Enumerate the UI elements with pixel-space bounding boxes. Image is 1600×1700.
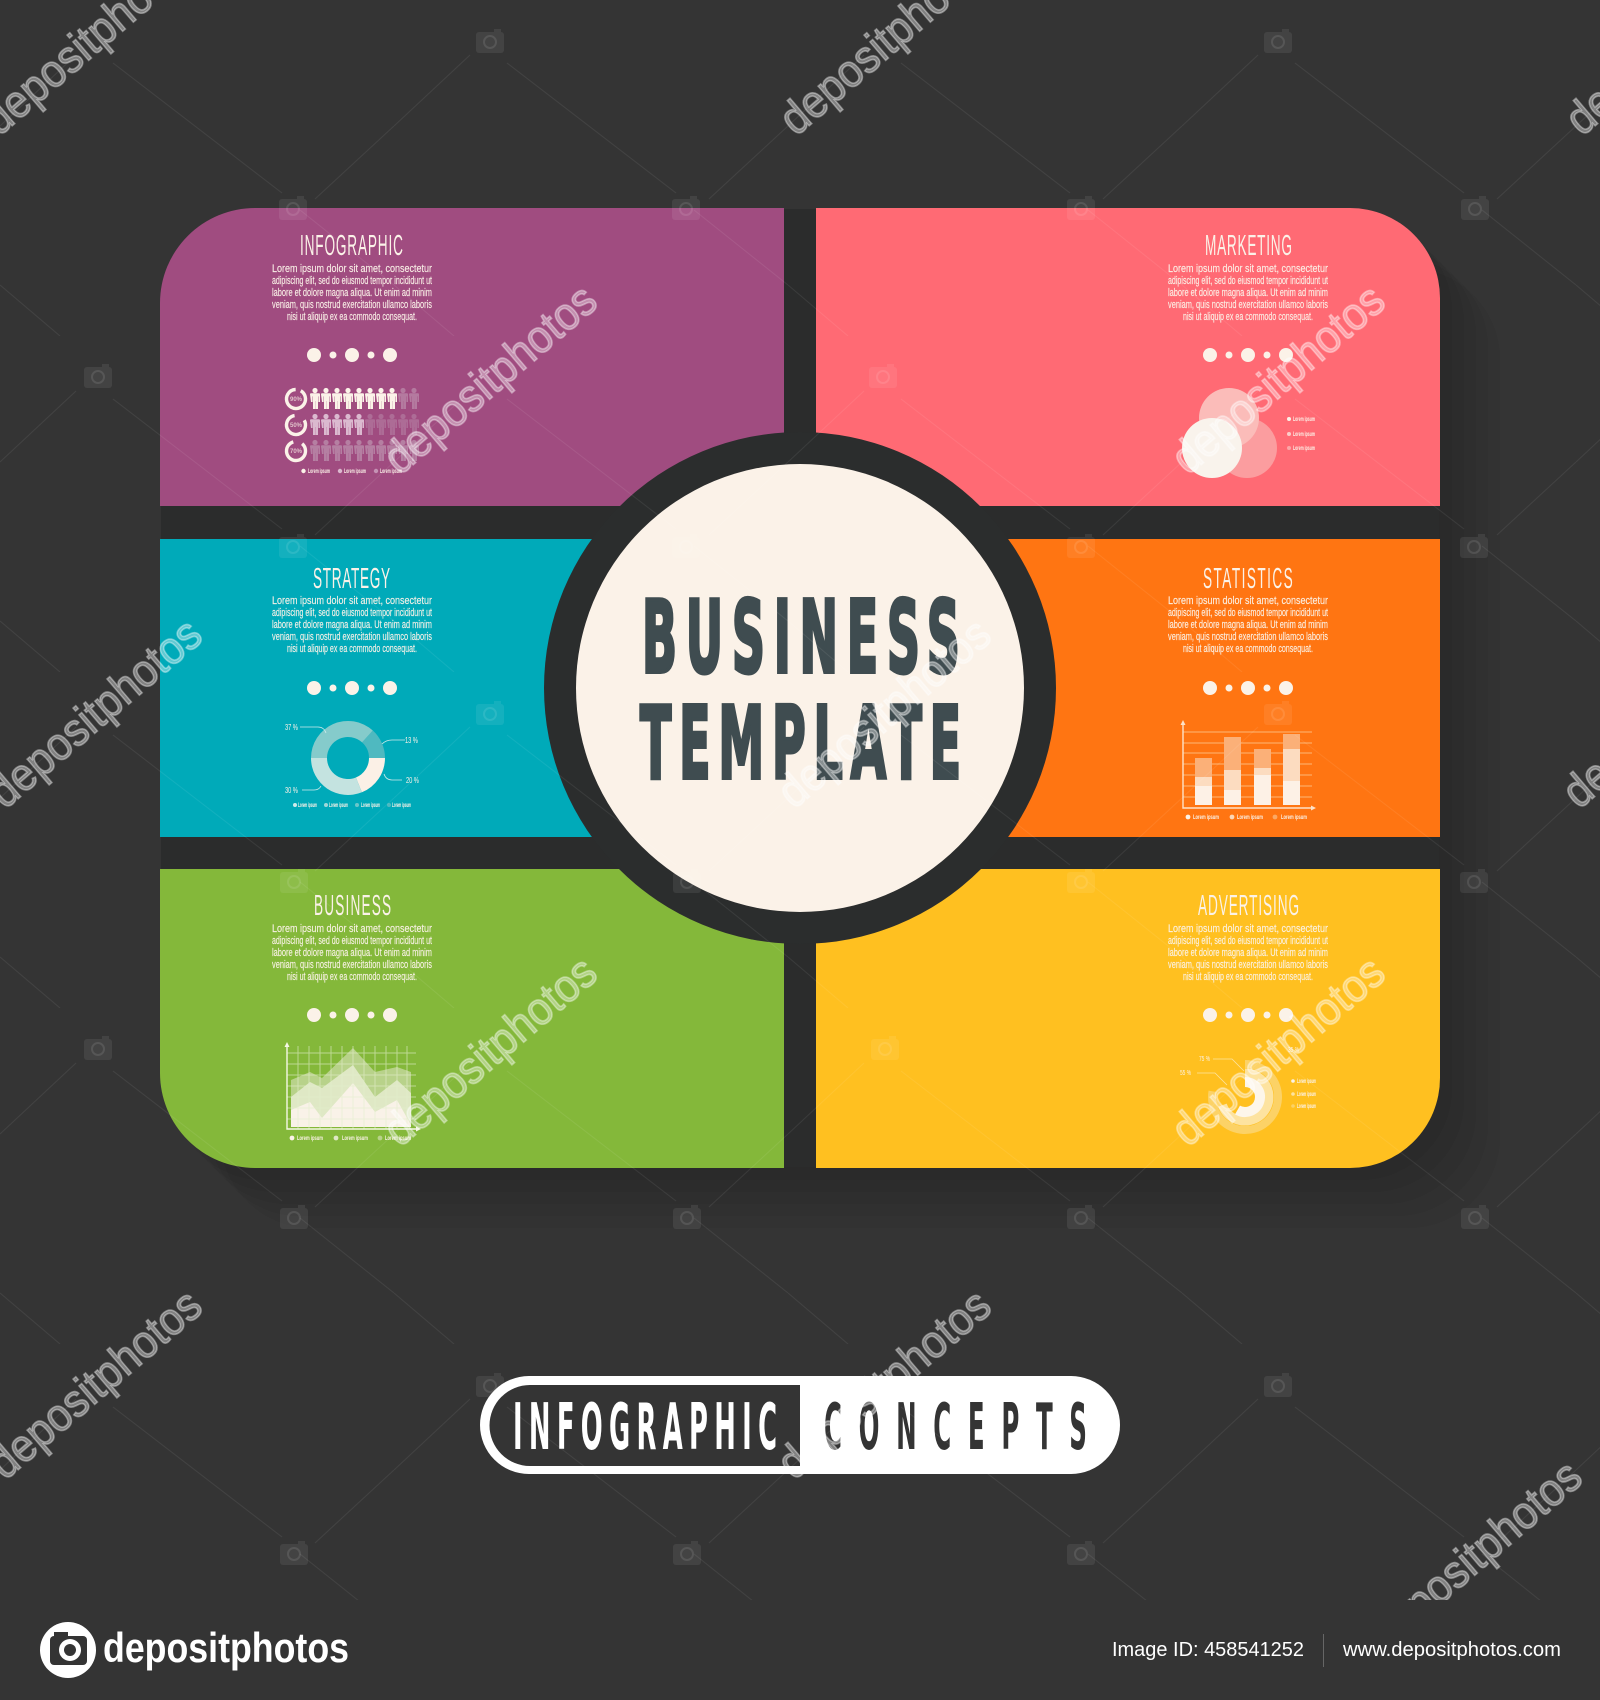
legend: Lorem ipsum: [1297, 1079, 1316, 1085]
text block: statistics: veniam, quis nostrud exercitation ullamco laboris: [1168, 631, 1328, 643]
watermark cameras: [84, 29, 1489, 1565]
text block: advertising: Lorem ipsum dolor sit amet, consectetur: [1168, 923, 1328, 935]
central dark ring: [544, 432, 1056, 944]
website url: www.depositphotos.com: [1342, 1639, 1561, 1661]
text block: marketing: nisi ut aliquip ex ea commodo consequat.: [1183, 311, 1313, 323]
watermark text: depositphotos: [767, 1278, 1000, 1489]
watermark text: depositphotos: [1161, 273, 1394, 484]
radial bar chart: [1180, 1047, 1299, 1130]
footer logo: depositphotos: [103, 1624, 349, 1671]
text block: strategy: [272, 595, 432, 655]
legend: Lorem ipsum: [1237, 815, 1263, 821]
panel: business: [160, 869, 784, 1168]
legend: [293, 803, 411, 809]
legend: Lorem ipsum: [1293, 417, 1315, 423]
watermark text: depositphotos: [373, 273, 606, 484]
watermark text: depositphotos: [373, 945, 606, 1156]
legend: Lorem ipsum: [344, 469, 366, 475]
panel: advertising: [816, 869, 1440, 1168]
legend: Lorem ipsum: [1281, 815, 1307, 821]
panel: marketing: [816, 208, 1440, 506]
panel: infographic: [160, 208, 784, 506]
text block: advertising: [1168, 923, 1328, 983]
donut chart: 20 %: [406, 776, 419, 785]
legend: Lorem ipsum: [1293, 446, 1315, 452]
legend: [1186, 815, 1307, 821]
text block: business: veniam, quis nostrud exercitation ullamco laboris: [272, 959, 432, 971]
watermark text: depositphotos: [767, 607, 1000, 818]
legend: Lorem ipsum: [392, 803, 411, 809]
text block: strategy: adipiscing elit, sed do eiusmod tempor incididunt ut: [272, 607, 432, 619]
central circle: [576, 464, 1024, 912]
footer bar: [0, 1600, 1600, 1700]
footer divider: [1323, 1634, 1324, 1667]
watermark text: depositphotos: [1161, 945, 1394, 1156]
long shadow of the panel group: [172, 220, 1500, 1228]
text block: business: Lorem ipsum dolor sit amet, consectetur: [272, 923, 432, 935]
gaps between panels: [161, 209, 1439, 1167]
text block: infographic: [272, 263, 432, 323]
legend: Lorem ipsum: [1293, 432, 1315, 438]
area chart: [284, 1042, 421, 1132]
badge: infographic concepts: CONCEPTS: [824, 1390, 1087, 1465]
pagination dots: [307, 681, 397, 695]
text block: marketing: Lorem ipsum dolor sit amet, consectetur: [1168, 263, 1328, 275]
legend: Lorem ipsum: [308, 469, 330, 475]
footer logo: [40, 1622, 349, 1678]
text block: strategy: Lorem ipsum dolor sit amet, consectetur: [272, 595, 432, 607]
legend: Lorem ipsum: [361, 803, 380, 809]
text block: infographic: nisi ut aliquip ex ea commodo consequat.: [287, 311, 417, 323]
legend: Lorem ipsum: [1297, 1104, 1316, 1110]
heading: strategy: STRATEGY: [313, 561, 390, 594]
donut chart: 13 %: [405, 736, 418, 745]
donut chart: 37 %: [285, 723, 298, 732]
text block: strategy: labore et dolore magna aliqua. Ut enim ad minim: [272, 619, 432, 631]
text block: marketing: veniam, quis nostrud exercitation ullamco laboris: [1168, 299, 1328, 311]
text block: strategy: nisi ut aliquip ex ea commodo consequat.: [287, 643, 417, 655]
text block: advertising: nisi ut aliquip ex ea commodo consequat.: [1183, 971, 1313, 983]
venn chart: [1182, 388, 1277, 478]
text block: statistics: labore et dolore magna aliqua. Ut enim ad minim: [1168, 619, 1328, 631]
title: [640, 581, 961, 802]
stacked bar chart: [1180, 720, 1316, 810]
legend: Lorem ipsum: [1193, 815, 1219, 821]
text block: strategy: veniam, quis nostrud exercitation ullamco laboris: [272, 631, 432, 643]
text block: marketing: adipiscing elit, sed do eiusmod tempor incididunt ut: [1168, 275, 1328, 287]
text block: advertising: labore et dolore magna aliqua. Ut enim ad minim: [1168, 947, 1328, 959]
pictogram chart: [283, 386, 419, 464]
legend: Lorem ipsum: [329, 803, 348, 809]
radial bar chart: 35 %: [1288, 1047, 1299, 1054]
text block: infographic: veniam, quis nostrud exercitation ullamco laboris: [272, 299, 432, 311]
text block: statistics: adipiscing elit, sed do eiusmod tempor incididunt ut: [1168, 607, 1328, 619]
text block: statistics: [1168, 595, 1328, 655]
heading: advertising: ADVERTISING: [1198, 888, 1299, 921]
text block: advertising: veniam, quis nostrud exercitation ullamco laboris: [1168, 959, 1328, 971]
text block: business: nisi ut aliquip ex ea commodo consequat.: [287, 971, 417, 983]
pagination dots: [1203, 348, 1293, 362]
panel: strategy: [160, 539, 784, 837]
pictogram chart: 70%: [290, 449, 303, 455]
text block: statistics: Lorem ipsum dolor sit amet, consectetur: [1168, 595, 1328, 607]
heading: business: BUSINESS: [314, 888, 391, 921]
legend: [301, 469, 402, 475]
radial bar chart: 75 %: [1199, 1056, 1210, 1063]
text block: statistics: nisi ut aliquip ex ea commodo consequat.: [1183, 643, 1313, 655]
radial bar chart: 55 %: [1180, 1070, 1191, 1077]
badge: infographic concepts: [480, 1376, 1120, 1474]
legend: Lorem ipsum: [385, 1136, 411, 1142]
legend: [1291, 1079, 1316, 1110]
legend: Lorem ipsum: [297, 1136, 323, 1142]
text block: infographic: labore et dolore magna aliqua. Ut enim ad minim: [272, 287, 432, 299]
legend: Lorem ipsum: [342, 1136, 368, 1142]
title: BUSINESS: [642, 581, 960, 696]
pagination dots: [307, 348, 397, 362]
legend: Lorem ipsum: [1297, 1092, 1316, 1098]
text block: business: [272, 923, 432, 983]
text block: infographic: adipiscing elit, sed do eiusmod tempor incididunt ut: [272, 275, 432, 287]
badge: infographic concepts: INFOGRAPHIC: [513, 1389, 777, 1465]
pagination dots: [1203, 681, 1293, 695]
title: TEMPLATE: [640, 687, 961, 802]
text block: advertising: adipiscing elit, sed do eiusmod tempor incididunt ut: [1168, 935, 1328, 947]
pictogram chart: 50%: [290, 423, 303, 429]
donut chart: [285, 721, 419, 795]
text block: business: labore et dolore magna aliqua. Ut enim ad minim: [272, 947, 432, 959]
pictogram chart: 90%: [290, 397, 303, 403]
pagination dots: [1203, 1008, 1293, 1022]
heading: statistics: STATISTICS: [1203, 561, 1293, 594]
pagination dots: [307, 1008, 397, 1022]
legend: Lorem ipsum: [380, 469, 402, 475]
legend: [290, 1136, 411, 1142]
image id: Image ID: 458541252: [1112, 1639, 1304, 1661]
legend: Lorem ipsum: [298, 803, 317, 809]
legend: [1287, 417, 1315, 452]
heading: marketing: MARKETING: [1205, 228, 1292, 261]
text block: business: adipiscing elit, sed do eiusmod tempor incididunt ut: [272, 935, 432, 947]
heading: infographic: INFOGRAPHIC: [300, 228, 403, 261]
text block: marketing: [1168, 263, 1328, 323]
donut chart: 30 %: [285, 786, 298, 795]
text block: infographic: Lorem ipsum dolor sit amet, consectetur: [272, 263, 432, 275]
text block: marketing: labore et dolore magna aliqua. Ut enim ad minim: [1168, 287, 1328, 299]
panel: statistics: [816, 539, 1440, 837]
